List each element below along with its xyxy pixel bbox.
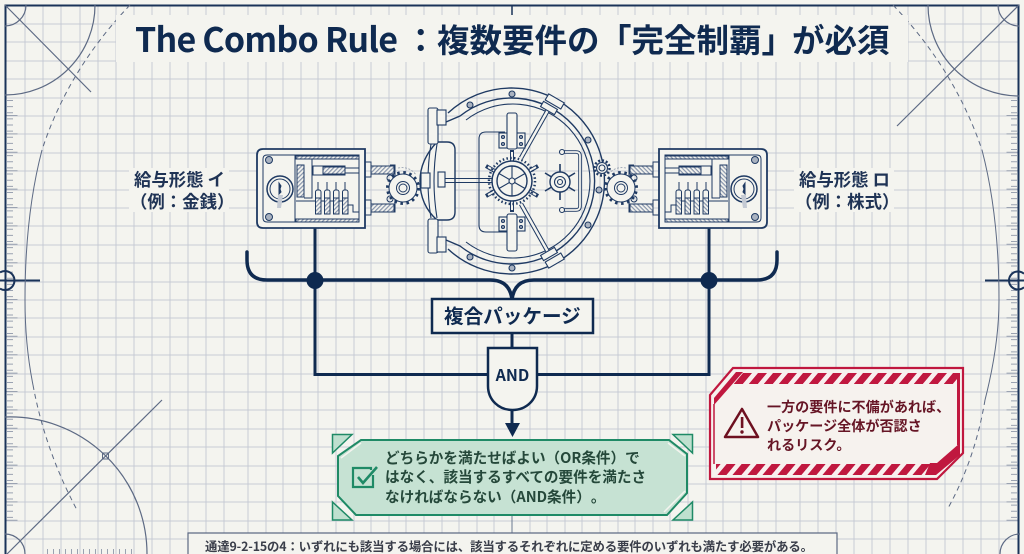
warning text	[767, 397, 950, 455]
result text	[385, 447, 646, 507]
label: 給与形態 ロ: 給与形態 ロ	[799, 167, 890, 192]
left lock: 給与形態 イ	[257, 149, 418, 228]
arrow to result	[505, 423, 520, 437]
AND gate: AND	[495, 362, 529, 386]
icon: check box	[353, 467, 377, 487]
label: 給与形態 イ: 給与形態 イ	[134, 167, 225, 192]
panel: risk warning	[710, 368, 963, 479]
icon: warning triangle	[725, 409, 758, 437]
warning text: れるリスク。	[767, 435, 850, 455]
connector wiring	[247, 228, 777, 425]
composite package box: 複合パッケージ	[444, 300, 581, 329]
right lock: 給与形態 ロ	[606, 149, 767, 228]
warning text: パッケージ全体が否認さ	[767, 416, 922, 436]
title: 複数要件の	[437, 15, 600, 62]
panel: AND condition result	[332, 434, 692, 520]
title: が必須	[792, 15, 890, 62]
warning text: 一方の要件に不備があれば、	[767, 397, 950, 417]
title	[116, 13, 908, 62]
vault door	[420, 88, 610, 274]
AND gate	[488, 348, 537, 410]
title: ：	[404, 15, 437, 62]
result text: どちらかを満たせばよい（OR条件）で	[385, 447, 640, 468]
title: 「完全制覇」	[599, 15, 794, 62]
result text: はなく、該当するすべての要件を満たさ	[385, 466, 646, 487]
title: The Combo Rule	[135, 13, 398, 62]
result text: なければならない（AND条件）。	[385, 486, 605, 507]
label: 給与形態 ロ	[794, 167, 899, 214]
label: 給与形態 イ: （例：金銭）	[130, 189, 234, 214]
label: 給与形態 イ	[129, 167, 234, 214]
label: 給与形態 ロ: （例：株式）	[795, 189, 899, 214]
center guide line	[511, 516, 513, 533]
